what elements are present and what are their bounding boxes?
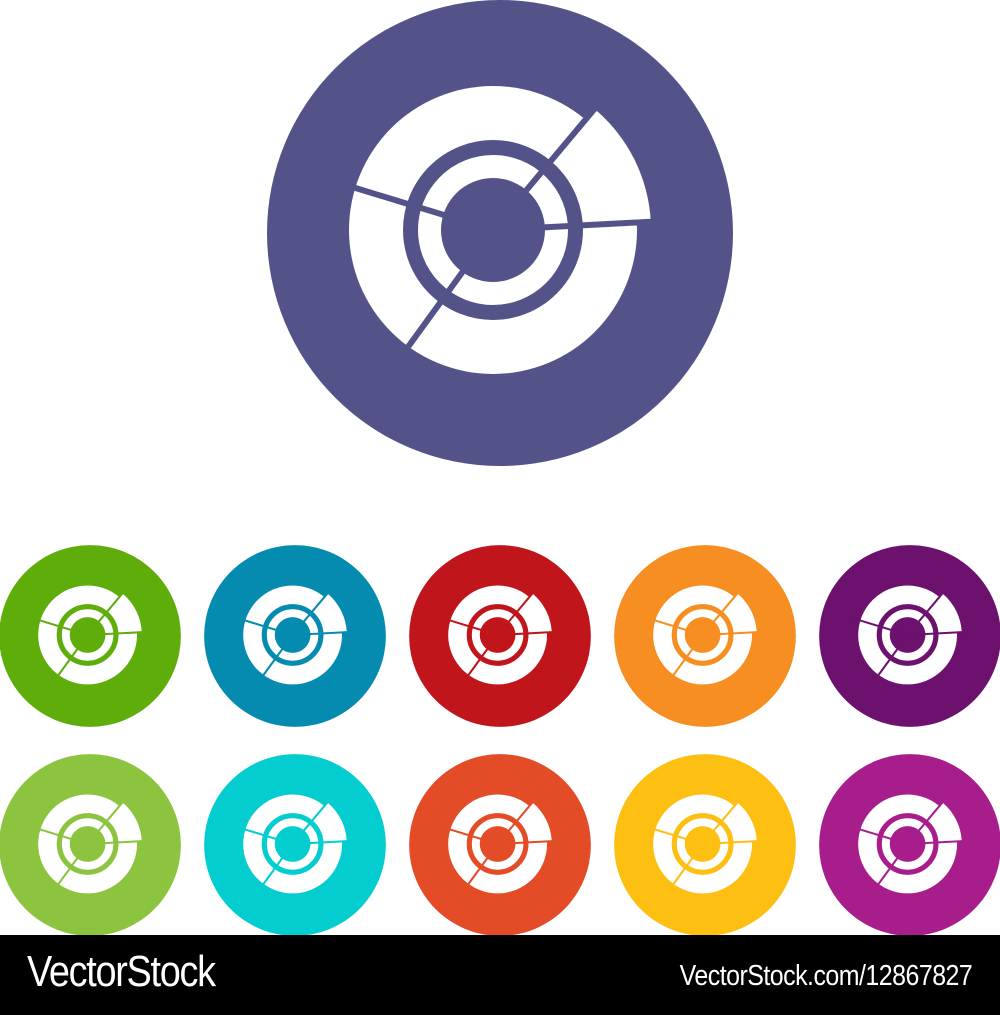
- small icon: purple: [819, 545, 1000, 727]
- small icon: red orange: [409, 754, 591, 936]
- small icon: light green: [0, 754, 181, 936]
- footer brand: VectorStock: [27, 947, 215, 996]
- small icon: yellow: [614, 754, 796, 936]
- footer url: VectorStock.com/12867827: [679, 960, 972, 992]
- small icon: red: [409, 545, 591, 727]
- small icon: cyan: [204, 754, 386, 936]
- small icon: blue: [204, 545, 386, 727]
- footer bar: [0, 935, 1000, 1015]
- small icon: green: [0, 545, 181, 727]
- main icon: purple: [267, 0, 733, 466]
- small icon: magenta: [819, 754, 1000, 936]
- small icon: orange: [614, 545, 796, 727]
